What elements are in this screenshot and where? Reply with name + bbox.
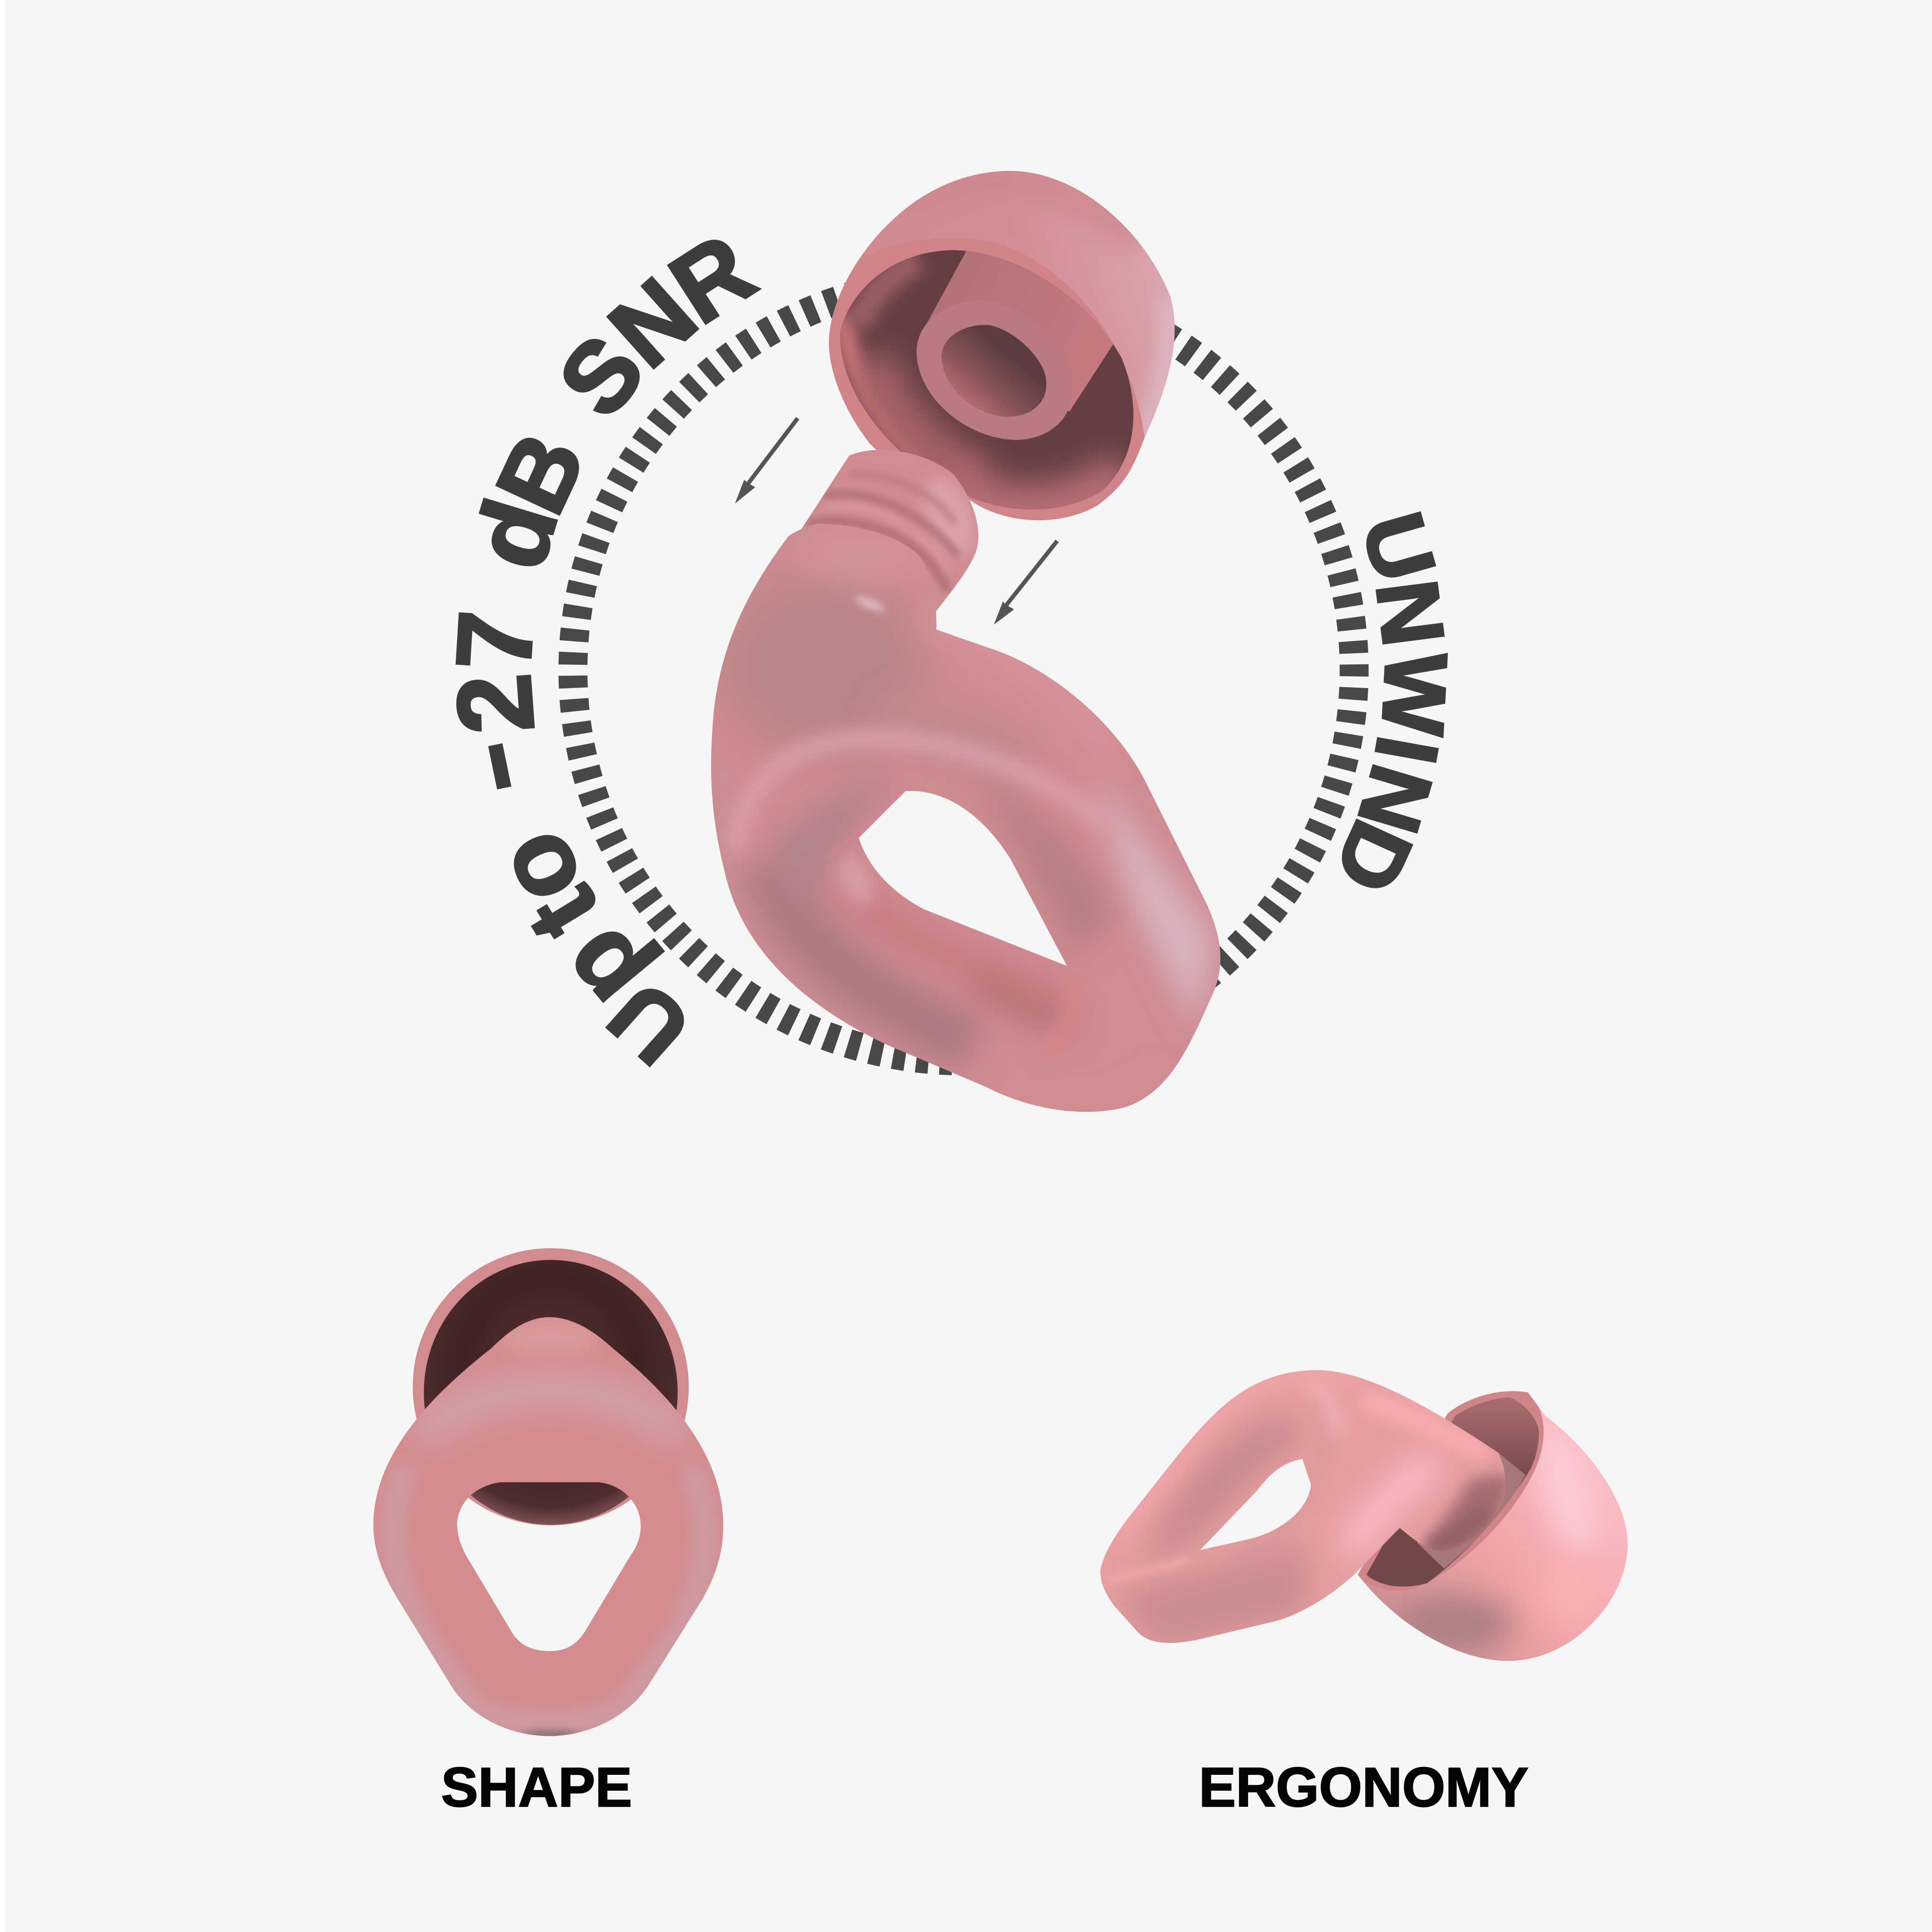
- earplug front view: shape: [363, 1248, 733, 1750]
- curved text: Upto -27 dB SNR: –: [422, 732, 560, 804]
- curved text: Upto -27 dB SNR: U: [589, 962, 708, 1084]
- earplug body with loop: [1090, 1355, 1546, 1657]
- curved text: Upto -27 dB SNR: S: [537, 315, 665, 437]
- curved text: Upto -27 dB SNR: 2: [434, 670, 556, 738]
- tube end ring: [917, 300, 1072, 440]
- ear tip cap: [813, 160, 1183, 530]
- curved text: UNWIND: D: [1315, 807, 1431, 907]
- curved text: Upto -27 dB SNR: R: [651, 212, 772, 345]
- main earplug: exploded view: [690, 160, 1244, 1134]
- earplug side view: ergonomy: [1090, 1355, 1639, 1676]
- curved text: Upto -27 dB SNR: p: [536, 906, 669, 1032]
- curved text: Upto -27 dB SNR: d: [451, 487, 580, 581]
- curved text: UNWIND: N: [1358, 574, 1463, 651]
- earplug body with loop: [690, 505, 1244, 1134]
- arrow: left insertion arrow: [735, 418, 797, 504]
- label: SHAPE: SHAPE: [441, 1757, 632, 1818]
- ear tip cap: [1343, 1380, 1639, 1676]
- front body: [363, 1306, 733, 1750]
- cap interior: [1366, 1397, 1539, 1587]
- back cap: [413, 1248, 689, 1525]
- cap rim: [1358, 1391, 1543, 1591]
- cap interior: [826, 240, 1146, 523]
- curved text: Upto -27 dB SNR: B: [474, 417, 606, 529]
- arrow: right insertion arrow: [994, 541, 1057, 625]
- inner tube: [920, 240, 1115, 412]
- curved text: UNWIND: U: [1344, 503, 1454, 592]
- curved text: Upto -27 dB SNR: [422, 212, 772, 1084]
- curved text: Upto -27 dB SNR: 7: [434, 608, 556, 674]
- curved text: UNWIND: I: [1357, 729, 1457, 771]
- ribbed stem: [789, 437, 998, 635]
- cap rim: [813, 238, 1148, 530]
- curved text: Upto -27 dB SNR: t: [504, 869, 621, 959]
- curved text: Upto -27 dB SNR: o: [470, 815, 605, 923]
- stem disc behind rim: [1417, 1453, 1525, 1569]
- tick ring: [573, 280, 1354, 1061]
- curved text: UNWIND: [1315, 503, 1466, 907]
- tube bore: [941, 325, 1046, 417]
- label: ERGONOMY: ERGONOMY: [1199, 1757, 1529, 1818]
- curved text: Upto -27 dB SNR: N: [588, 257, 717, 388]
- curved text: UNWIND: W: [1364, 650, 1466, 738]
- curved text: UNWIND: N: [1339, 755, 1451, 843]
